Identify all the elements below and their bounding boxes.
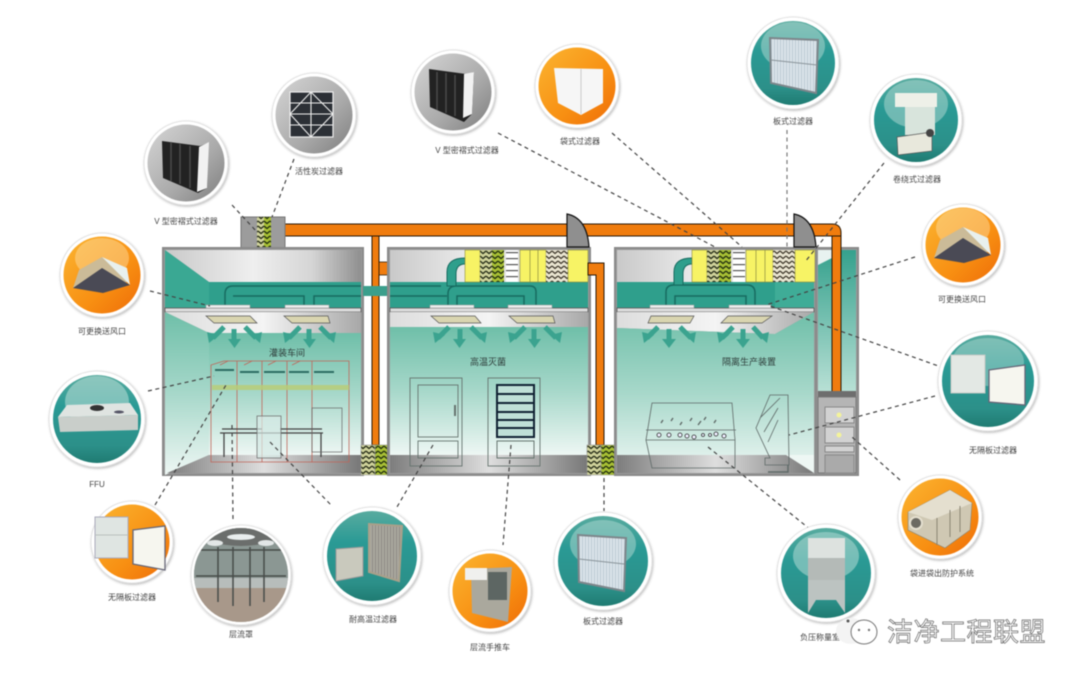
- room 1: filling workshop: [163, 248, 363, 475]
- icon: panel filter: [770, 38, 818, 93]
- airflow arrows: [213, 327, 331, 342]
- filter card: roll filter: [870, 74, 962, 184]
- filter card: laminar flow hood photo: 层流罩: [229, 629, 253, 639]
- rooftop carbon filter box: [241, 217, 285, 248]
- airflow arrows: [647, 327, 763, 342]
- icon: bag-in bag-out housing: [908, 490, 972, 548]
- filter card: activated carbon filter: [272, 73, 356, 176]
- filter card: roll filter: 卷绕式过滤器: [893, 174, 941, 184]
- supply ducts: [225, 286, 361, 305]
- air handling unit: [692, 250, 815, 282]
- isolator console: [646, 403, 736, 468]
- filter card: negative pressure weighing room: 负压称量室: [800, 632, 840, 642]
- filter card: replaceable air outlet, right: 可更换送风口: [938, 294, 986, 304]
- bottom filter between rooms 2 and 3: [587, 445, 615, 475]
- watermark text: 洁净工程联盟: [887, 617, 1046, 647]
- filter card: V-bank filter, top: V 型密褶式过滤器: [435, 145, 499, 155]
- filter card: high temperature filter: 耐高温过滤器: [349, 614, 397, 624]
- icon: high temperature filters: [336, 524, 402, 581]
- icon: air outlet: [73, 257, 130, 293]
- filter card: high temperature filter: [323, 507, 421, 624]
- photo: laminar flow room: [194, 528, 288, 622]
- filter card: V-bank filter, upper left: V 型密褶式过滤器: [154, 216, 218, 226]
- icon: V-bank filter: [429, 69, 474, 122]
- filter card: bag filter: [535, 44, 619, 146]
- icon: air outlet: [934, 227, 991, 263]
- filter card: laminar flow trolley: 层流手推车: [470, 642, 510, 652]
- icon: carbon filter: [290, 92, 333, 137]
- cleanroom building: [163, 214, 858, 475]
- air outlets: [650, 305, 694, 308]
- filter card: negative pressure weighing room: [777, 524, 875, 642]
- icon: WeChat logo: [836, 618, 877, 644]
- filter card: separatorless filter, left: 无隔板过滤器: [108, 592, 156, 602]
- filter card: bag filter: 袋式过滤器: [560, 136, 600, 146]
- icon: roll filter unit: [895, 93, 937, 155]
- watermark: [836, 617, 1046, 647]
- top orange supply duct: [285, 224, 841, 445]
- isolator side unit: [756, 395, 789, 472]
- filter card: V-bank filter, upper left: [144, 121, 228, 226]
- air outlets: [206, 305, 250, 308]
- filling line equipment: [211, 361, 349, 462]
- filter card: laminar flow trolley: [449, 550, 531, 652]
- filter card: separatorless filter, right: 无隔板过滤器: [969, 445, 1017, 455]
- icon: V-bank filter: [162, 141, 209, 193]
- filter card: replaceable air outlet, left: 可更换送风口: [78, 326, 126, 336]
- bottom filter between rooms 1 and 2: [361, 445, 389, 475]
- room label: 隔离生产装置: [722, 356, 776, 367]
- airflow arrows: [438, 327, 556, 342]
- leader lines: [148, 130, 944, 545]
- supply ducts: [666, 285, 755, 305]
- room label: 灌装车间: [269, 347, 305, 358]
- filter card: V-bank filter, top: [411, 50, 499, 155]
- filter card: panel filter, bottom: 板式过滤器: [583, 616, 623, 626]
- icon: separatorless filters: [95, 517, 165, 570]
- room 3: isolation production unit: [615, 214, 816, 475]
- icon: trolley: [465, 567, 512, 622]
- room label: 高温灭菌: [470, 356, 506, 367]
- filter card: activated carbon filter: 活性炭过滤器: [295, 166, 343, 176]
- icon: fan filter unit: [58, 403, 138, 432]
- orange return duct room 2: [588, 263, 604, 445]
- filter card: bag-in bag-out system: [898, 475, 982, 578]
- filter card: FFU: [49, 371, 145, 489]
- exhaust hood: [794, 214, 816, 247]
- icon: weighing booth: [808, 538, 845, 613]
- filter card: panel filter, top: 板式过滤器: [773, 116, 813, 126]
- filter card: bag-in bag-out system: 袋进袋出防护系统: [910, 568, 974, 578]
- exhaust hood: [567, 214, 589, 247]
- filter card: separatorless filter, left: [91, 501, 173, 602]
- air outlets: [430, 305, 474, 308]
- filter card: FFU: FFU: [89, 480, 105, 489]
- filter card: panel filter, top: [747, 17, 839, 126]
- filter card: laminar flow hood photo: [190, 518, 292, 639]
- room 2: high temperature sterilisation: [388, 214, 590, 475]
- teal connector between rooms: [363, 286, 388, 296]
- sterilizer door: [410, 378, 462, 466]
- filter card: separatorless filter, right: [938, 331, 1038, 455]
- filter card: panel filter, bottom: [554, 512, 652, 626]
- filter card: replaceable air outlet, left: [60, 233, 144, 336]
- air handling unit: [465, 250, 588, 282]
- icon: panel filter: [578, 535, 626, 591]
- side plenum and air handling cabinet: [816, 236, 858, 475]
- icon: bag filter: [554, 68, 603, 115]
- icon: separatorless filters: [951, 355, 1025, 405]
- supply ducts: [390, 286, 536, 305]
- filter card: replaceable air outlet, right: [922, 204, 1004, 304]
- sterilizer rack: [488, 378, 540, 466]
